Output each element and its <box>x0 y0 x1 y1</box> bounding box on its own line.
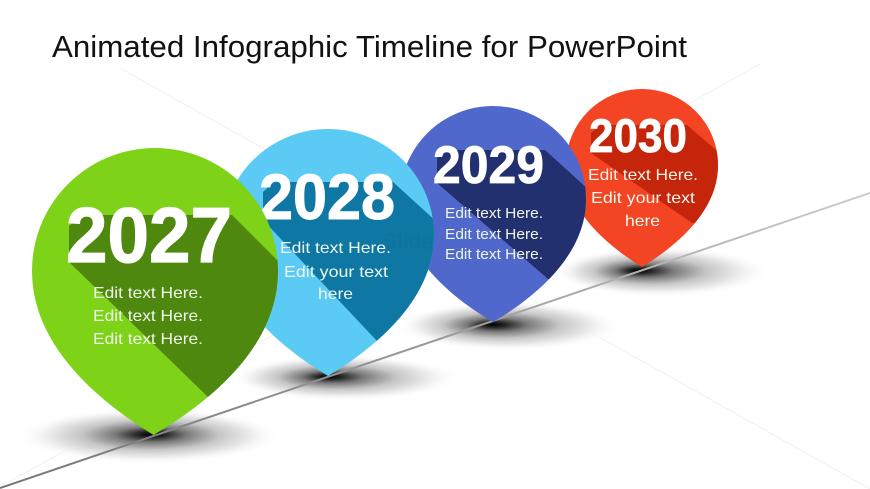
title: Animated Infographic Timeline for PowerPoint <box>52 29 687 64</box>
pin: 2028: Edit text Here. <box>280 240 391 257</box>
pin: 2029: Edit text Here. <box>445 226 543 243</box>
pin: 2027: 2027 <box>66 191 232 279</box>
pin: 2028: here <box>318 286 353 303</box>
pin: 2028: 2028 <box>259 161 395 233</box>
pin: 2029: 2029 <box>433 136 544 195</box>
pin: 2027 <box>32 148 300 435</box>
pin: 2029: Edit text Here. <box>445 246 543 263</box>
pin: 2028 <box>238 129 434 376</box>
pin: 2030: 2030 <box>589 109 687 162</box>
pin: 2028: Edit your text <box>284 264 389 281</box>
pin: 2027: Edit text Here. <box>93 331 203 348</box>
shadows beneath pins <box>17 247 771 464</box>
pin: 2027: Edit text Here. <box>93 285 203 302</box>
pin: 2029: Edit text Here. <box>445 205 543 222</box>
pin: 2030: here <box>625 213 660 230</box>
pin: 2030 <box>566 89 730 267</box>
timeline line <box>0 193 870 488</box>
watermark: Slide <box>383 229 433 254</box>
pin: 2030: Edit your text <box>591 190 696 207</box>
pin: 2030: Edit text Here. <box>588 167 698 184</box>
pin: 2027: Edit text Here. <box>93 308 203 325</box>
pin: 2029 <box>406 106 586 322</box>
